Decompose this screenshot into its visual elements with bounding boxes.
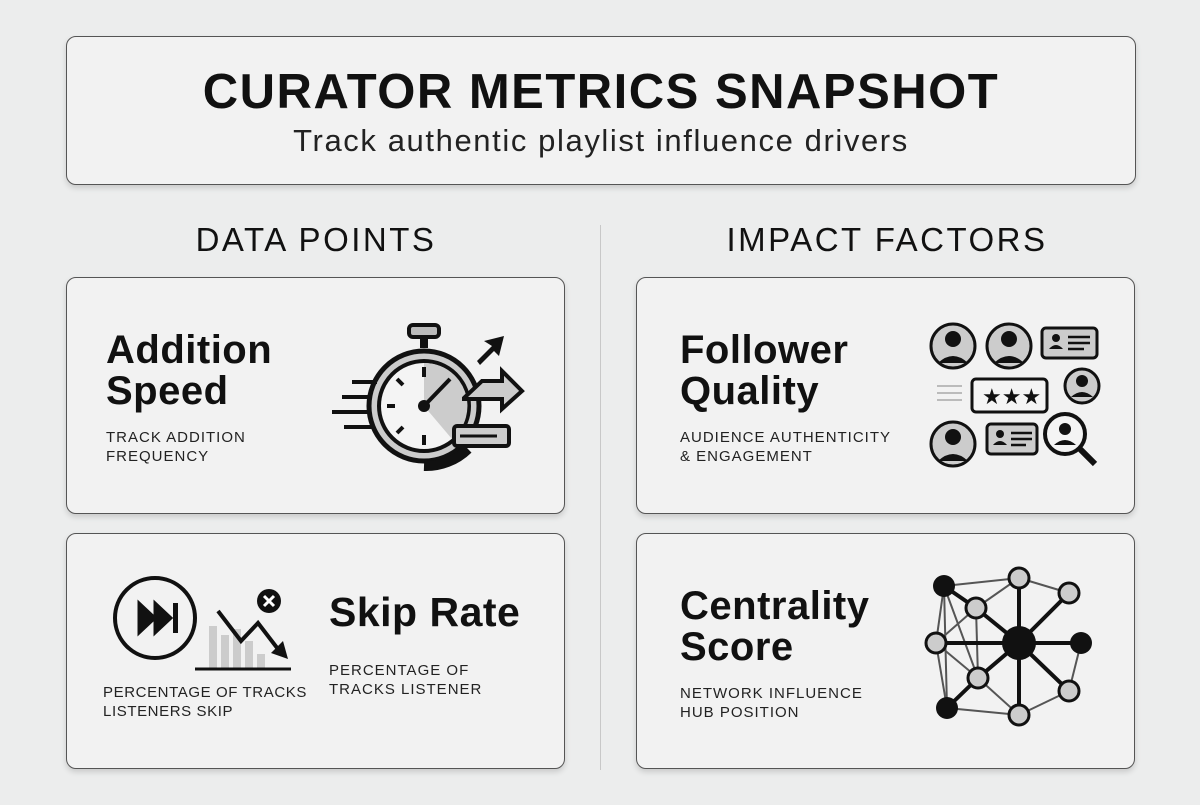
card subtitle: TRACK ADDITION bbox=[106, 429, 246, 446]
card subtitle bbox=[106, 429, 246, 465]
card title: Speed bbox=[106, 369, 229, 413]
card subtitle bbox=[680, 685, 863, 721]
card title: Follower bbox=[680, 328, 848, 372]
card subtitle bbox=[329, 662, 482, 698]
card subtitle: FREQUENCY bbox=[106, 448, 209, 465]
heading: data points: DATA POINTS bbox=[196, 221, 436, 258]
card title: Quality bbox=[680, 369, 819, 413]
icon: audience bbox=[930, 322, 1100, 468]
icon caption: LISTENERS SKIP bbox=[103, 703, 233, 720]
heading: impact factors: IMPACT FACTORS bbox=[726, 221, 1048, 258]
icon caption: PERCENTAGE OF TRACKS bbox=[103, 684, 307, 701]
icon: network bbox=[924, 566, 1092, 726]
card title: Addition bbox=[106, 328, 272, 372]
card title bbox=[106, 328, 272, 413]
panel: follower quality bbox=[636, 277, 1135, 514]
icon: stopwatch bbox=[332, 323, 525, 471]
card subtitle: HUB POSITION bbox=[680, 704, 800, 721]
card title bbox=[680, 328, 848, 413]
panel: centrality score bbox=[636, 533, 1135, 769]
card subtitle: PERCENTAGE OF bbox=[329, 662, 469, 679]
panel: addition speed bbox=[66, 277, 565, 514]
card title: Skip Rate bbox=[329, 589, 520, 635]
card title: Centrality bbox=[680, 584, 870, 628]
title panel bbox=[66, 36, 1136, 185]
card title bbox=[680, 584, 870, 669]
card subtitle: AUDIENCE AUTHENTICITY bbox=[680, 429, 891, 446]
icon caption bbox=[103, 684, 307, 720]
subtitle: Track authentic playlist influence drivers bbox=[293, 123, 909, 158]
title: CURATOR METRICS SNAPSHOT bbox=[203, 65, 999, 119]
card subtitle: TRACKS LISTENER bbox=[329, 681, 482, 698]
card subtitle: NETWORK INFLUENCE bbox=[680, 685, 863, 702]
card subtitle: & ENGAGEMENT bbox=[680, 448, 813, 465]
panel: skip rate bbox=[66, 533, 565, 769]
card subtitle bbox=[680, 429, 891, 465]
icon: audience: ★★★ bbox=[982, 384, 1041, 409]
icon: skip chart bbox=[113, 576, 291, 670]
card title: Score bbox=[680, 625, 794, 669]
